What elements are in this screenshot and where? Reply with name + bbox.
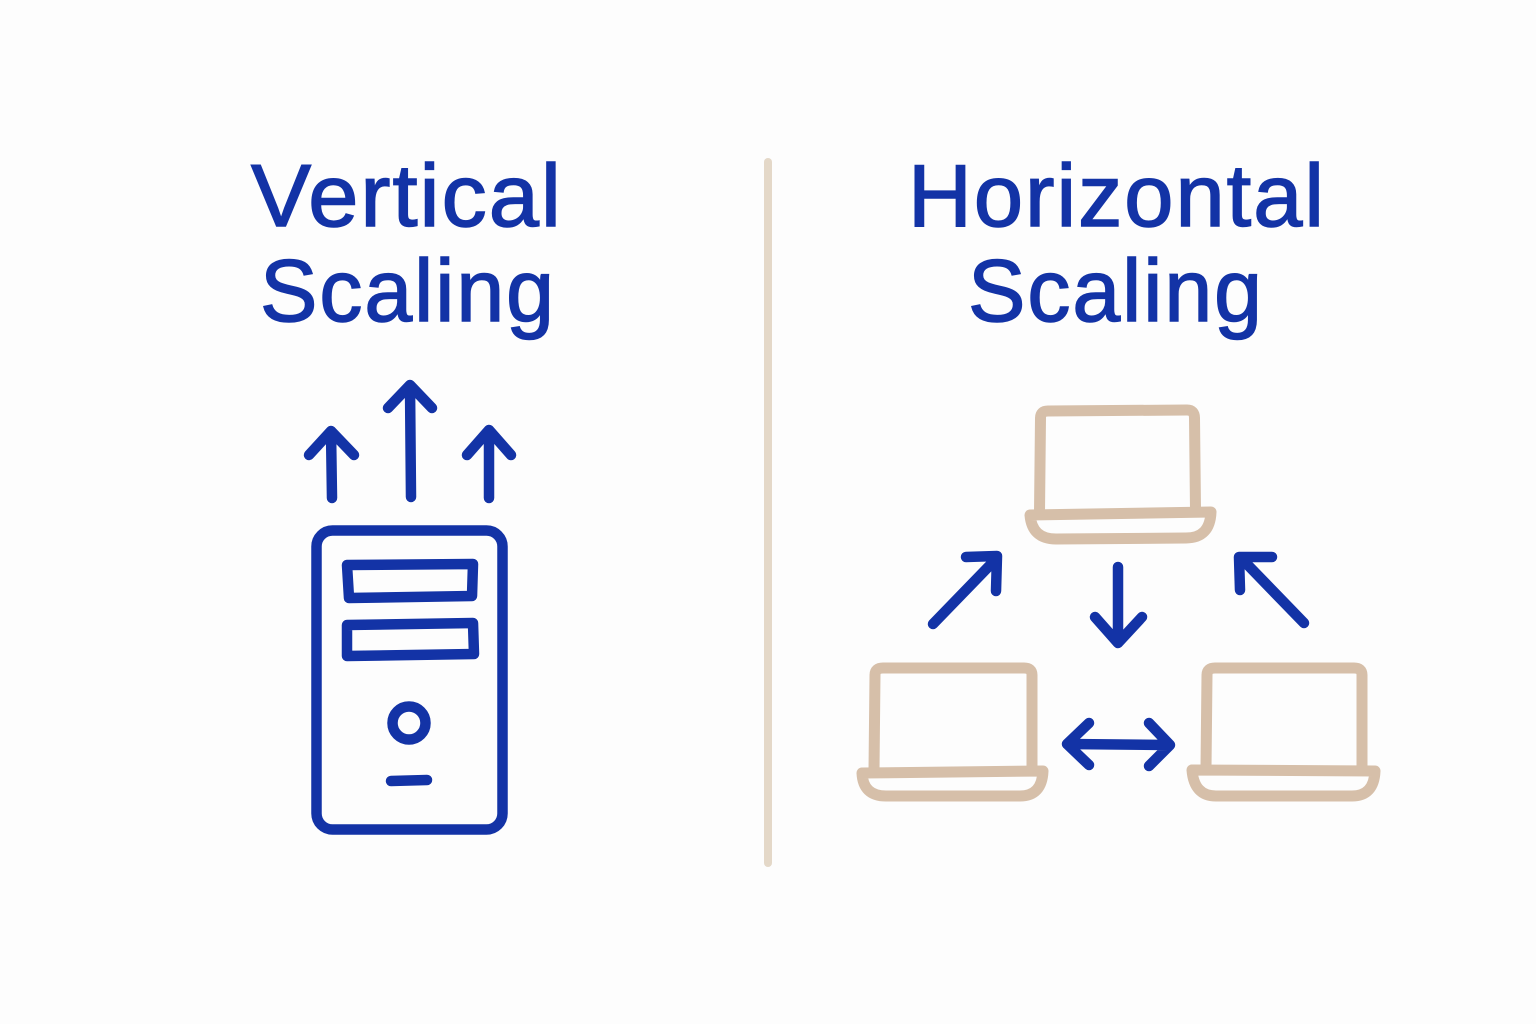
icon: up arrows	[309, 385, 511, 498]
arrow: up right	[933, 556, 997, 624]
icon: left laptop	[862, 668, 1043, 796]
heading: vertical scaling: Vertical	[251, 146, 563, 245]
heading: horizontal scaling: Horizontal	[908, 146, 1326, 245]
heading: vertical scaling	[251, 146, 563, 340]
heading: vertical scaling: Scaling	[260, 241, 556, 340]
heading: horizontal scaling	[908, 146, 1326, 340]
arrow: up left	[1239, 557, 1304, 623]
heading: horizontal scaling: Scaling	[968, 241, 1264, 340]
icon: top laptop	[1030, 410, 1211, 539]
arrow: down	[1095, 567, 1142, 643]
arrow: double horizontal	[1067, 723, 1170, 766]
icon: right laptop	[1192, 668, 1375, 796]
icon: server tower	[316, 530, 502, 830]
divider	[764, 162, 772, 863]
